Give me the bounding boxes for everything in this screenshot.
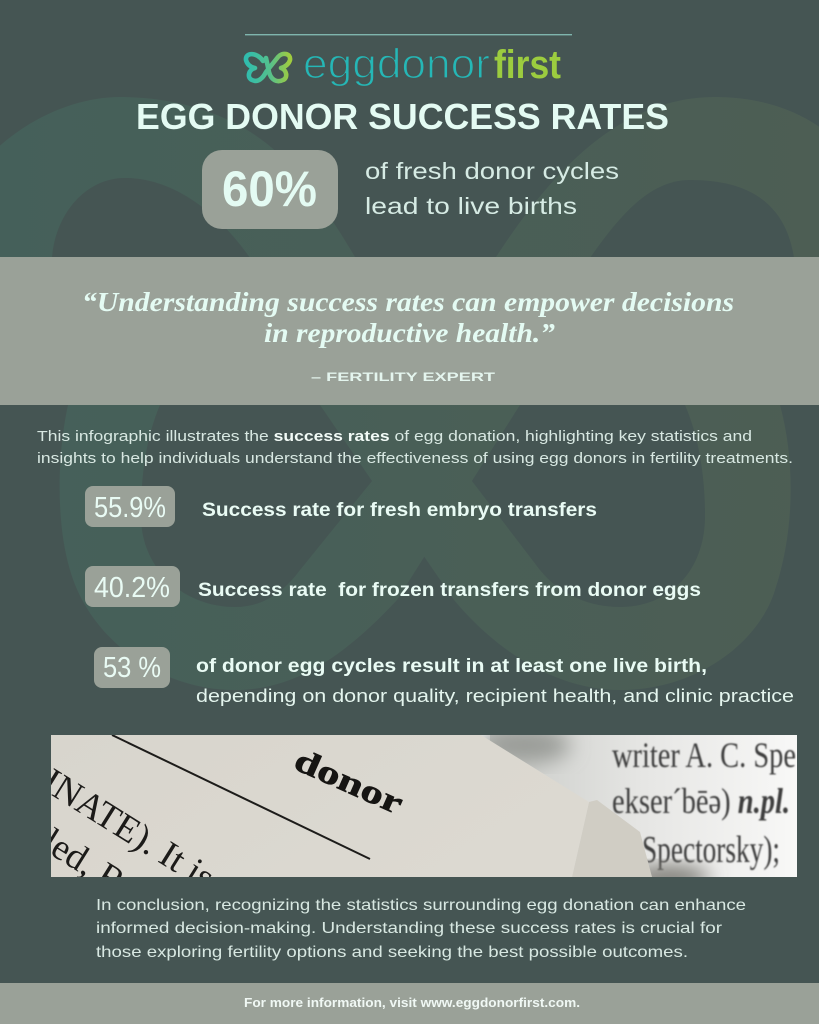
stat chip	[202, 150, 338, 229]
photo: dictionary page with the word donor	[51, 735, 797, 877]
footer band	[0, 983, 819, 1024]
headline stat: 60%	[202, 150, 619, 229]
stat row: 55.9%	[85, 486, 597, 527]
blurred dictionary text: ekser´bēə) n.pl.	[612, 781, 790, 821]
header rule	[245, 34, 572, 35]
conclusion text: those exploring fertility options and seeking the best possible outcomes.	[96, 944, 688, 961]
stat description: lead to live births	[365, 193, 577, 219]
intro text	[37, 428, 793, 467]
logo: eggdonorfirst: first	[494, 43, 561, 87]
intro text: insights to help individuals understand the effectiveness of using egg donors in fertility treatments.	[37, 450, 793, 467]
footer band: For more information, visit www.eggdonorfirst.com.	[244, 996, 580, 1010]
logo: eggdonorfirst	[246, 40, 561, 87]
quote	[82, 287, 734, 348]
book page	[51, 735, 589, 877]
conclusion text: informed decision-making. Understanding these success rates is crucial for	[96, 920, 723, 937]
stat row: 55.9%: 55.9%	[94, 492, 166, 524]
stat description	[365, 158, 619, 219]
stat row: 53 %: of donor egg cycles result in at least one live birth,	[196, 656, 707, 677]
wordmark: eggdonor	[303, 40, 490, 87]
quote attribution: – FERTILITY EXPERT	[311, 370, 496, 384]
intro text: This infographic illustrates the success rates of egg donation, highlighting key statistics and	[37, 428, 752, 445]
stat row: 53 %: depending on donor quality, recipient health, and clinic practice	[196, 686, 794, 706]
dividing rule	[112, 735, 370, 859]
panel: quote band	[0, 257, 819, 405]
printed text	[51, 768, 212, 877]
stat row: 53 %: 53 %	[103, 652, 161, 684]
quote: “Understanding success rates can empower decisions	[82, 287, 734, 317]
book page edge	[572, 800, 652, 877]
background watermark: butterfly symbol	[0, 97, 819, 690]
icon: butterfly	[246, 54, 290, 81]
stat row: 53 %	[94, 647, 794, 706]
stat row: 40.2%: Success rate for frozen transfers from donor eggs	[198, 580, 701, 601]
conclusion text: In conclusion, recognizing the statistics surrounding egg donation can enhance	[96, 897, 746, 914]
conclusion text	[96, 897, 746, 961]
stat row: 40.2%	[85, 566, 701, 607]
blurred dictionary text	[612, 735, 796, 871]
printed word: donor: donor	[289, 742, 408, 822]
printed text: INATE). It is	[35, 761, 222, 899]
printed text: led, R	[35, 821, 132, 903]
stat row: 40.2%: 40.2%	[94, 572, 170, 604]
stat value: 60%	[222, 161, 317, 217]
stat description: of fresh donor cycles	[365, 158, 619, 184]
title: EGG DONOR SUCCESS RATES	[136, 96, 669, 137]
page shadow	[480, 727, 570, 763]
stat row: 55.9%: Success rate for fresh embryo transfers	[202, 500, 597, 521]
quote: in reproductive health.”	[264, 318, 556, 348]
